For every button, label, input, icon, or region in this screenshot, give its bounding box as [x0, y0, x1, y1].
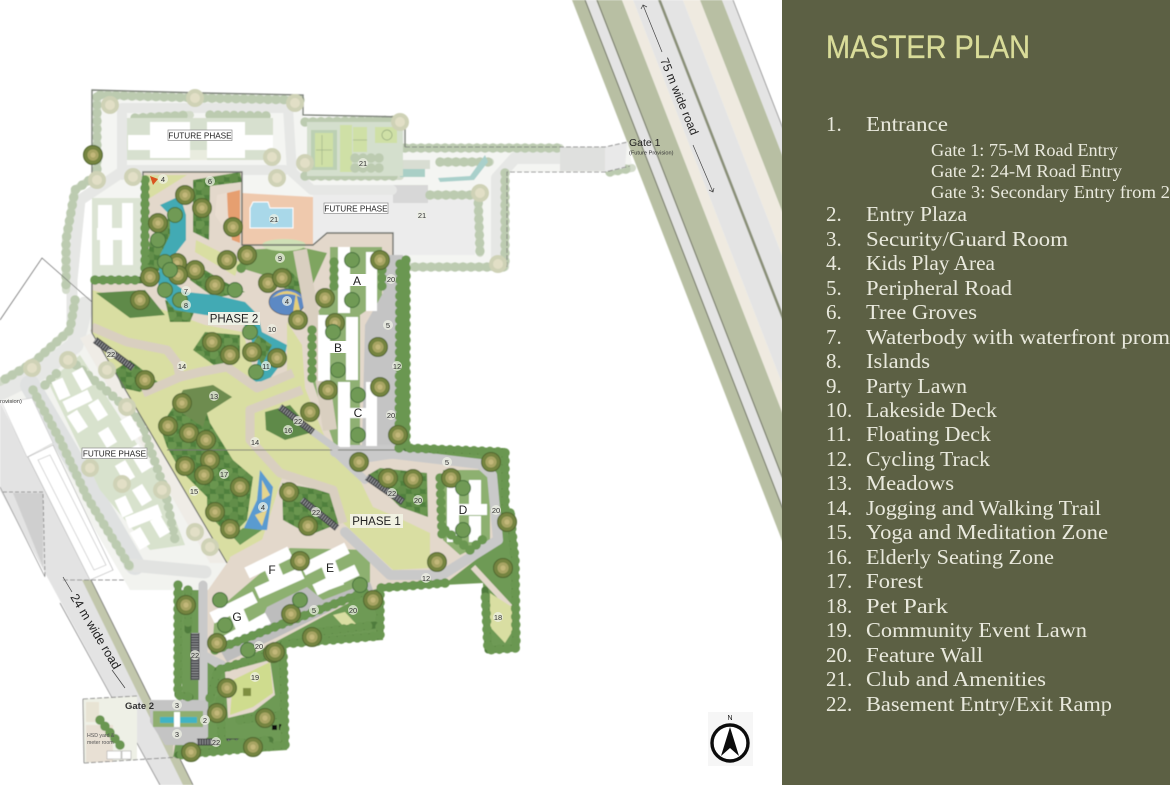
- legend list: Elderly Seating Zone: [866, 545, 1054, 569]
- tower A: [338, 247, 377, 313]
- key numbers on plan: 22: [212, 738, 220, 747]
- key numbers on plan: 20: [414, 496, 422, 505]
- kids area lawn: [145, 175, 187, 198]
- play pools: [269, 289, 305, 315]
- legend list: Peripheral Road: [866, 276, 1013, 300]
- basement ramps: [95, 340, 403, 742]
- hsd yard label: meter room: [87, 740, 114, 746]
- key numbers on plan: 5: [312, 606, 316, 615]
- legend list: Cycling Track: [866, 447, 991, 471]
- future phase west small block: [92, 198, 143, 278]
- key numbers on plan: 6: [208, 177, 212, 186]
- legend list: 2.: [826, 202, 842, 226]
- legend list: 14.: [826, 496, 852, 520]
- phase labels: [208, 312, 403, 528]
- legend list: 7.: [826, 325, 842, 349]
- key numbers on plan: 14: [251, 438, 259, 447]
- tower G: [212, 597, 268, 642]
- perimeter hedges: [95, 180, 516, 755]
- key numbers on plan: 21: [418, 211, 426, 220]
- key numbers on plan: 18: [494, 613, 502, 622]
- key numbers on plan: 7: [184, 287, 188, 296]
- tower letters: E: [326, 561, 334, 575]
- party lawn: [237, 247, 327, 297]
- key numbers on plan: 22: [312, 508, 320, 517]
- legend list: Security/Guard Room: [866, 227, 1068, 251]
- water edge trees: [150, 208, 264, 380]
- key numbers on plan: 22: [191, 651, 199, 660]
- legend list: 6.: [826, 300, 842, 324]
- key numbers on plan: 13: [210, 392, 218, 401]
- community event lawn: [225, 660, 275, 718]
- legend list: 1.: [826, 112, 842, 136]
- hsd yard label: HSD yard &: [87, 733, 115, 739]
- tower letters: G: [232, 610, 242, 624]
- key numbers on plan: 12: [422, 574, 430, 583]
- key numbers on plan: 20: [387, 411, 395, 420]
- tower E: [303, 548, 357, 590]
- phase one and two base: [83, 172, 518, 763]
- key numbers on plan: 19: [251, 673, 259, 682]
- legend list: Community Event Lawn: [866, 618, 1088, 642]
- legend list: 22.: [826, 692, 852, 716]
- 75 m wide road: [572, 0, 1038, 785]
- 24 m road label and arrows: 24 m wide road: [67, 591, 123, 672]
- key numbers on plan: 16: [284, 426, 292, 435]
- legend list: 13.: [826, 471, 852, 495]
- waterbody: [158, 196, 287, 382]
- future phase north building block: [127, 118, 273, 160]
- gate 1 label: [629, 137, 674, 156]
- key numbers on plan: 21: [359, 159, 367, 168]
- specimen trees: [84, 146, 516, 762]
- cut off provision label: rovision): [0, 399, 22, 405]
- key numbers on plan: 15: [190, 487, 198, 496]
- legend list: 5.: [826, 276, 842, 300]
- key numbers on plan: 17: [220, 470, 228, 479]
- north compass icon: N: [727, 715, 733, 722]
- legend list: 8.: [826, 349, 842, 373]
- gate 1 label: (Future Provision): [629, 150, 674, 156]
- tower C: [338, 382, 377, 447]
- legend list: 19.: [826, 618, 852, 642]
- residential towers: [212, 247, 487, 642]
- 24 m wide road: [0, 402, 193, 785]
- 75 m road label and arrows: 75 m wide road: [657, 56, 701, 137]
- legend list: Gate 3: Secondary Entry from 2: [931, 182, 1170, 202]
- pavement trails: [92, 327, 180, 393]
- future phase labels: FUTURE PHASE: [324, 204, 388, 214]
- pet park lawn: [490, 593, 515, 643]
- 75 m road label and arrows: [641, 5, 714, 192]
- future phase north and east grounds: [66, 90, 632, 320]
- faded trees on future phases: [23, 89, 507, 556]
- future phase west wing: [0, 300, 227, 590]
- key numbers on plan: 2: [203, 716, 207, 725]
- thin site boundary line: [0, 258, 92, 320]
- legend list: Meadows: [866, 471, 954, 495]
- legend list: Waterbody with waterfront prom: [866, 325, 1170, 349]
- legend list: 15.: [826, 520, 852, 544]
- tower letters: D: [459, 503, 468, 517]
- key numbers on plan: 4: [261, 503, 265, 512]
- legend list: Lakeside Deck: [866, 398, 998, 422]
- legend list: Pet Park: [866, 594, 949, 618]
- title: MASTER PLAN: [826, 29, 1030, 65]
- key numbers on plan: 14: [178, 362, 186, 371]
- phase boundary lines: [92, 172, 393, 333]
- forest masses: [160, 385, 253, 537]
- key numbers on plan: 12: [393, 362, 401, 371]
- tower D: [447, 480, 487, 542]
- legend list: Entry Plaza: [866, 202, 968, 226]
- service strip: [362, 255, 403, 447]
- legend list: Forest: [866, 569, 923, 593]
- key numbers on plan: 20: [255, 642, 263, 651]
- legend list: Gate 1: 75-M Road Entry: [931, 140, 1118, 160]
- key numbers on plan: 10: [268, 325, 276, 334]
- tower letters: A: [353, 274, 361, 288]
- building courts: [208, 528, 372, 655]
- legend list: Jogging and Walking Trail: [866, 496, 1101, 520]
- legend list: Yoga and Meditation Zone: [866, 520, 1108, 544]
- legend list: 18.: [826, 594, 852, 618]
- entry plaza: [150, 700, 208, 745]
- legend list: 12.: [826, 447, 852, 471]
- legend list: 11.: [826, 422, 851, 446]
- tower letters: C: [354, 406, 363, 420]
- outer planting belts: [407, 448, 518, 652]
- gate 1 label: Gate 1: [629, 137, 661, 149]
- north compass icon: [708, 712, 753, 766]
- future phase labels: [82, 130, 388, 458]
- tower F: [247, 552, 302, 593]
- legend list: 16.: [826, 545, 852, 569]
- access roads: [335, 452, 498, 575]
- key numbers on plan: 8: [184, 301, 188, 310]
- legend list: Feature Wall: [866, 643, 983, 667]
- key numbers on plan: 4: [285, 297, 289, 306]
- legend list: Gate 2: 24-M Road Entry: [931, 161, 1122, 181]
- key numbers on plan: 20: [349, 606, 357, 615]
- hsd yard: [83, 696, 137, 763]
- legend list: Islands: [866, 349, 930, 373]
- tower letters: F: [268, 563, 276, 577]
- legend list: Kids Play Area: [866, 251, 996, 275]
- key numbers on plan: 22: [294, 417, 302, 426]
- tower B: [318, 315, 358, 381]
- key numbers on plan: 20: [387, 275, 395, 284]
- key numbers on plan: 11: [262, 362, 270, 371]
- future phase labels: FUTURE PHASE: [83, 450, 147, 458]
- tower letters: [232, 274, 468, 624]
- key numbers on plan: 9: [278, 254, 282, 263]
- key numbers on plan: [106, 158, 503, 747]
- legend list: 4.: [826, 251, 842, 275]
- club deck and pool: [242, 193, 313, 245]
- phase labels: PHASE 1: [352, 516, 401, 528]
- key numbers on plan: 5: [445, 458, 449, 467]
- 24 m road label and arrows: [63, 577, 125, 688]
- key numbers on plan: 20: [492, 506, 500, 515]
- key numbers on plan: 21: [270, 215, 278, 224]
- key numbers on plan: 3: [175, 730, 179, 739]
- future phase labels: FUTURE PHASE: [168, 132, 232, 140]
- legend list: Floating Deck: [866, 422, 992, 446]
- key numbers on plan: 22: [107, 350, 115, 359]
- legend list: [826, 112, 1170, 716]
- legend list: 17.: [826, 569, 852, 593]
- legend list: Basement Entry/Exit Ramp: [866, 692, 1112, 716]
- tower letters: B: [334, 341, 342, 355]
- meadow lawns: [92, 290, 430, 570]
- gate 2 label: Gate 2: [125, 701, 154, 712]
- legend list: 10.: [826, 398, 852, 422]
- key numbers on plan: 3: [175, 701, 179, 710]
- legend list: Party Lawn: [866, 374, 968, 398]
- phase labels: PHASE 2: [210, 314, 258, 326]
- legend list: 21.: [826, 667, 852, 691]
- key numbers on plan: 22: [388, 489, 396, 498]
- legend list: 3.: [826, 227, 842, 251]
- future phase sports courts: [307, 122, 403, 176]
- kids play icon: [150, 176, 158, 185]
- hsd yard label: [87, 733, 115, 746]
- legend list: Tree Groves: [866, 300, 977, 324]
- legend list: Club and Amenities: [866, 667, 1046, 691]
- legend list: 9.: [826, 374, 842, 398]
- legend list: Entrance: [866, 112, 948, 136]
- tree groves: [193, 172, 242, 240]
- legend list: 20.: [826, 643, 852, 667]
- panel: master plan legend: [782, 0, 1170, 785]
- key numbers on plan: 5: [386, 321, 390, 330]
- key numbers on plan: 4: [161, 175, 165, 184]
